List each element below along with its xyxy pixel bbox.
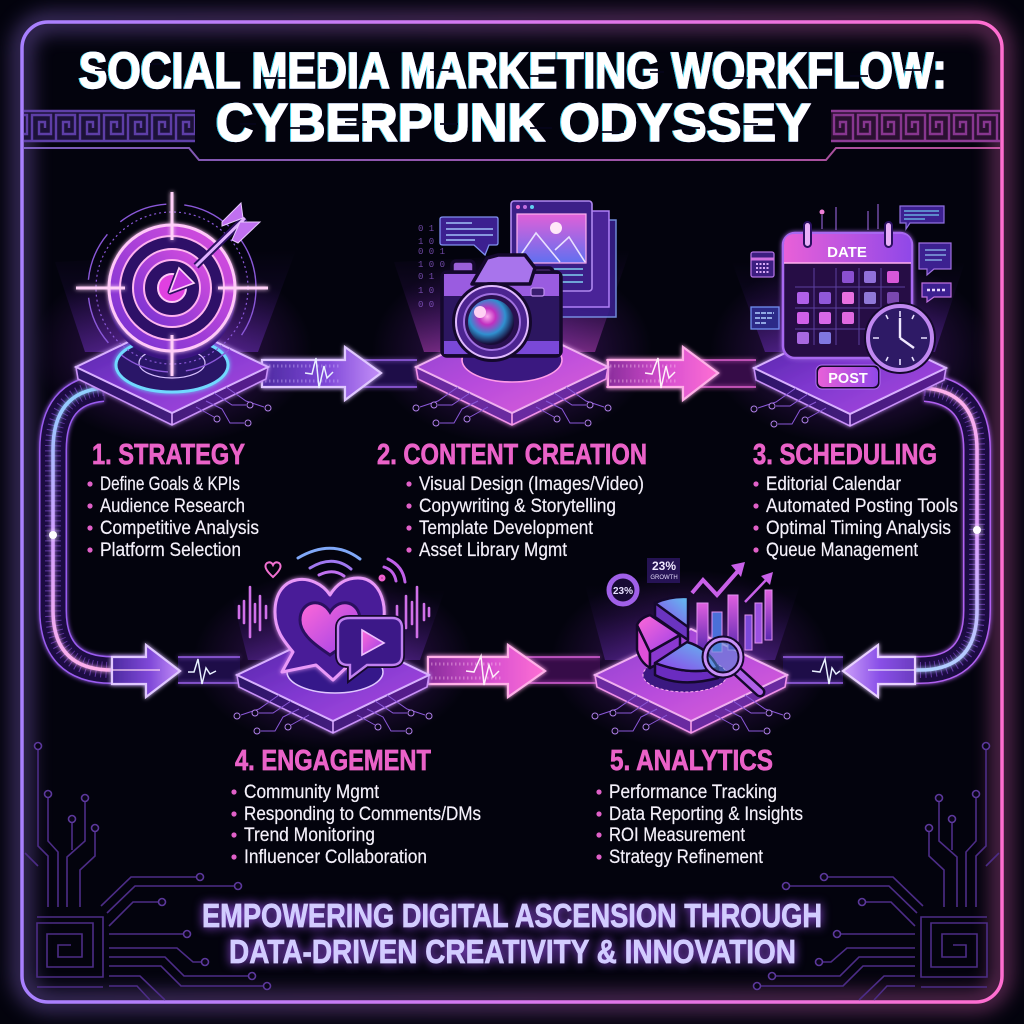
- connector: right loop: [874, 388, 981, 670]
- inner heart: [300, 603, 360, 655]
- camera: [442, 255, 561, 360]
- target icon: [76, 192, 268, 376]
- circuit corner left: [25, 742, 270, 1000]
- clock: [864, 302, 936, 374]
- platform: [237, 629, 429, 733]
- heading: 3. SCHEDULING: [753, 439, 937, 471]
- panel: 5 analytics: ROI Measurement: [609, 825, 746, 846]
- connector: left loop 3 to 4 side: [49, 388, 150, 670]
- chat bubble: [440, 217, 498, 255]
- platform: [595, 629, 787, 733]
- post button: POST: [828, 371, 868, 387]
- document cards: [511, 201, 616, 317]
- panel: 4 engagement: [231, 745, 481, 868]
- binary column: [418, 224, 445, 310]
- panel: 1 strategy: Platform Selection: [100, 540, 241, 561]
- header bracket line: [24, 148, 1000, 160]
- header ornament: right greek key: [831, 111, 1000, 141]
- arrow: loop into engagement: [112, 645, 240, 697]
- heading: 1. STRATEGY: [92, 439, 245, 471]
- panel: 4 engagement: Influencer Collaboration: [244, 847, 427, 868]
- title: [79, 42, 947, 153]
- binary column: 1 0: [418, 286, 434, 296]
- arrow: engagement to analytics: [428, 645, 600, 697]
- trend arrows: [692, 562, 773, 602]
- platform: [754, 322, 946, 426]
- footer tagline: EMPOWERING DIGITAL ASCENSION THROUGH: [202, 897, 822, 934]
- circuit corner right: [754, 742, 999, 1000]
- panel: 5 analytics: Strategy Refinement: [609, 847, 764, 868]
- panel: 1 strategy: [87, 439, 259, 561]
- heading: 5. ANALYTICS: [610, 745, 773, 777]
- panel: 1 strategy: Competitive Analysis: [100, 518, 259, 539]
- panel: 2 content creation: Visual Design (Images/Video): [419, 474, 644, 495]
- panel: 3 scheduling: Automated Posting Tools: [766, 496, 958, 517]
- magnifier: [705, 639, 760, 692]
- heading: 4. ENGAGEMENT: [235, 745, 431, 777]
- panel: 2 content creation: Copywriting & Storytelling: [419, 496, 616, 517]
- panel: 4 engagement: Trend Monitoring: [244, 825, 375, 846]
- platform: [416, 321, 608, 425]
- pie chart: [637, 597, 718, 682]
- platform glows: [32, 255, 990, 750]
- panel: 1 strategy: Define Goals & KPIs: [100, 474, 240, 495]
- heading: 2. CONTENT CREATION: [377, 439, 647, 471]
- step 4 visual: engagement on platform: [233, 548, 445, 734]
- panel: 3 scheduling: Optimal Timing Analysis: [766, 518, 951, 539]
- step 2 visual: camera on platform: [394, 201, 630, 426]
- binary column: 0 1: [418, 272, 434, 282]
- panel: 4 engagement: Community Mgmt: [244, 782, 380, 803]
- footer tagline: [202, 897, 822, 970]
- calendar label: DATE: [827, 244, 867, 261]
- small heart: [265, 562, 281, 577]
- light beam: [55, 250, 296, 352]
- panel: 3 scheduling: Queue Management: [766, 540, 919, 561]
- arrow: loop into analytics: [783, 645, 915, 697]
- panel: 2 content creation: Asset Library Mgmt: [419, 540, 568, 561]
- bars: [697, 590, 772, 652]
- binary column: 1 0 1: [418, 237, 445, 247]
- signal waves: [298, 548, 405, 582]
- footer tagline: DATA-DRIVEN CREATIVITY & INNOVATION: [229, 933, 796, 970]
- panel: 2 content creation: Template Development: [419, 518, 594, 539]
- side icons: [751, 204, 951, 329]
- panel: 3 scheduling: Editorial Calendar: [766, 474, 902, 495]
- panel: 4 engagement: Responding to Comments/DMs: [244, 804, 481, 825]
- heart bubble: [275, 578, 384, 680]
- panel: 3 scheduling: [753, 439, 958, 561]
- growth tag: GROWTH: [650, 575, 678, 581]
- panel: 5 analytics: Performance Tracking: [609, 782, 777, 803]
- step 5 visual: analytics on platform: [585, 558, 800, 734]
- arrow: strategy to content: [262, 347, 417, 400]
- donut: 23%: [613, 586, 633, 597]
- binary column: 0 0: [418, 300, 434, 310]
- platform: [76, 321, 268, 425]
- light beam: [732, 262, 965, 352]
- calendar body: [783, 222, 912, 358]
- light beam: [394, 250, 630, 352]
- binary column: 0 1 0: [418, 224, 445, 234]
- header ornament: left greek key: [24, 111, 195, 141]
- panel: 5 analytics: [596, 745, 803, 868]
- binary column: 1 0 0: [418, 260, 445, 270]
- binary column: 0 0 1: [418, 247, 445, 257]
- title: CYBERPUNK ODYSSEY: [216, 93, 811, 153]
- light beam: [585, 585, 800, 660]
- growth tag: 23%: [652, 559, 676, 573]
- growth tag: [647, 558, 680, 583]
- audio bars: [239, 587, 429, 637]
- donut: [609, 576, 637, 604]
- step 3 visual: calendar on platform: [732, 204, 965, 427]
- panel: 2 content creation: [377, 439, 647, 561]
- video bubble: [338, 618, 402, 678]
- arrow in target: [170, 203, 260, 292]
- step 1 visual: target on platform: [55, 192, 296, 426]
- panel: 1 strategy: Audience Research: [100, 496, 245, 517]
- light beam: [233, 590, 445, 660]
- arrow: content to scheduling: [606, 347, 756, 400]
- panel: 5 analytics: Data Reporting & Insights: [609, 804, 803, 825]
- post button: [816, 365, 880, 389]
